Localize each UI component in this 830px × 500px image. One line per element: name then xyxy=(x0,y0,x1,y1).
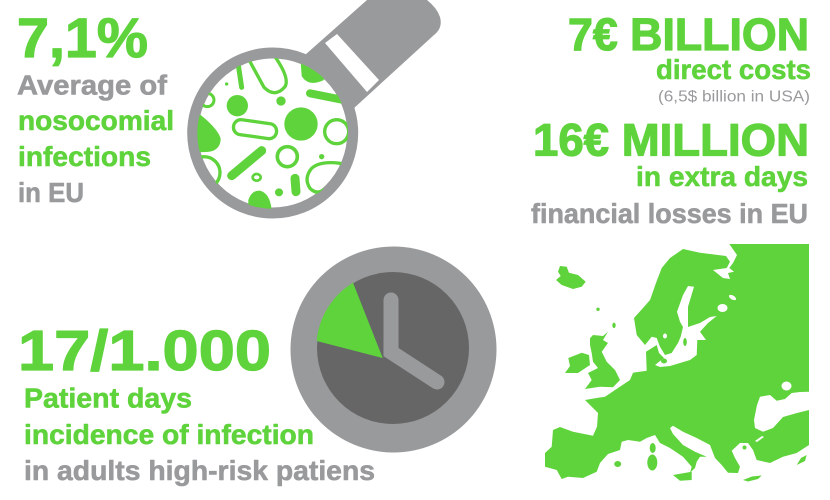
bacteria xyxy=(188,57,349,210)
Shetland xyxy=(612,323,616,328)
stat block: incidence xyxy=(18,319,375,486)
label: in EU: in EU xyxy=(18,177,84,208)
label: infections: infections xyxy=(18,141,151,172)
Lake Ladoga xyxy=(718,304,728,312)
icon: magnifying glass with bacteria xyxy=(188,0,441,213)
Lake Onega xyxy=(728,294,737,301)
map of Europe xyxy=(545,244,809,482)
note: USA comparison: (6,5$ billion in USA) xyxy=(658,88,810,106)
clock face xyxy=(317,272,469,424)
big number: 16 euro million: 16€ MILLION xyxy=(533,114,809,166)
big number: 7,1%: 7,1% xyxy=(17,6,148,69)
big number: 17/1.000: 17/1.000 xyxy=(18,319,271,383)
Mallorca xyxy=(614,461,621,467)
magnifier handle xyxy=(305,0,441,109)
Sea of Marmara xyxy=(755,436,764,442)
Sicily xyxy=(673,472,692,481)
lens ring xyxy=(193,53,353,213)
Sardinia xyxy=(647,454,657,470)
stat block: nosocomial infection average xyxy=(17,6,174,208)
label: nosocomial: nosocomial xyxy=(18,105,174,136)
clock outer ring xyxy=(290,246,496,452)
Lake Vanern xyxy=(663,334,667,338)
European mainland xyxy=(545,244,809,479)
handle white band xyxy=(325,34,379,92)
icon: clock xyxy=(290,246,496,452)
Faroe Islands xyxy=(596,308,600,311)
Cyprus xyxy=(797,455,807,465)
Iceland xyxy=(556,266,586,289)
clock hands xyxy=(391,300,437,382)
label: direct costs: direct costs xyxy=(656,54,811,85)
green pie wedge xyxy=(317,283,383,358)
label: in extra days: in extra days xyxy=(636,161,808,192)
Danish islands xyxy=(661,358,667,364)
big number: 7 euro billion: 7€ BILLION xyxy=(568,9,809,60)
stat block: costs xyxy=(531,9,811,229)
Gotland xyxy=(683,338,687,346)
Ireland xyxy=(565,353,590,373)
Aegean islands xyxy=(742,446,746,450)
label: incidence of infection: incidence of infection xyxy=(24,419,314,450)
label: patient days: Patient days xyxy=(24,382,192,414)
Corsica xyxy=(650,443,656,453)
Crete xyxy=(743,476,762,482)
label: financial losses in EU: financial losses in EU xyxy=(531,198,808,229)
Sea of Azov xyxy=(782,382,792,390)
Great Britain xyxy=(585,332,620,389)
label: in adults high-risk patiens: in adults high-risk patiens xyxy=(24,455,375,486)
label: average of: Average of xyxy=(17,70,168,100)
